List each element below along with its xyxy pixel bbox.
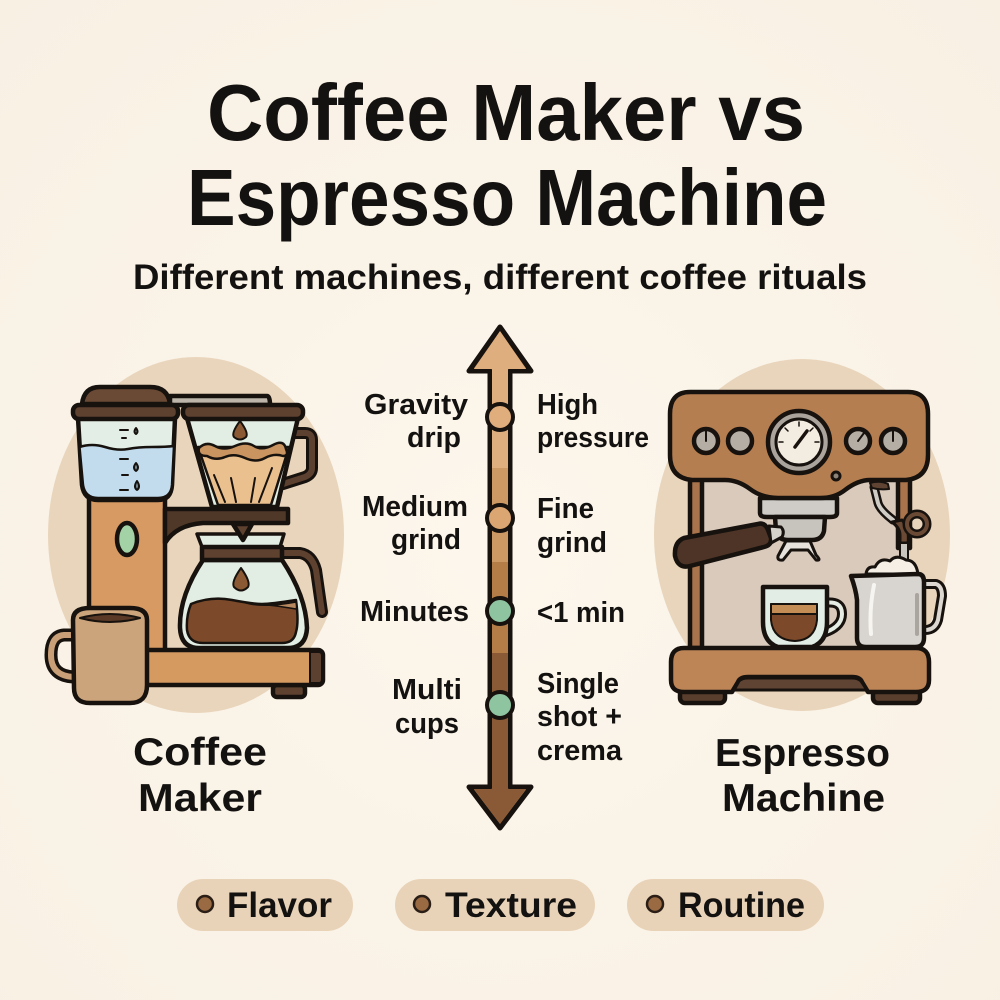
arrow colour band: upper middle: [492, 468, 508, 562]
subtitle: Different machines, different coffee rituals: [133, 258, 867, 297]
portafilter handle: [675, 524, 771, 567]
marker: mechanism: [487, 404, 513, 430]
background blob: espresso machine: [654, 359, 950, 711]
labels: espresso machine side: Single: [537, 668, 619, 700]
labels: coffee maker side: grind: [391, 524, 461, 556]
knob 2: [728, 429, 752, 453]
pill: flavor: [177, 879, 353, 931]
labels: espresso machine side: shot +: [537, 701, 622, 733]
group head: [760, 498, 837, 517]
right pillar: [898, 478, 910, 548]
machine base feet: [680, 690, 725, 703]
knob 1: [694, 429, 718, 453]
heading: coffee maker: Maker: [138, 777, 262, 820]
carafe handle: [280, 553, 322, 612]
labels: coffee maker side: drip: [407, 422, 461, 454]
crema: [771, 604, 817, 614]
labels: espresso machine side: pressure: [537, 422, 649, 454]
filter creases: [214, 468, 272, 502]
pill: routine: Routine: [678, 886, 805, 925]
arrow colour band: bottom: [474, 653, 526, 824]
wand ring: [907, 514, 927, 534]
espresso cup: [763, 587, 827, 647]
labels: espresso machine side: Fine: [537, 493, 594, 525]
knob 4: [881, 429, 905, 453]
left pillar: [690, 478, 702, 648]
marker: time: [487, 598, 513, 624]
dripper rim: [183, 405, 303, 419]
arrow outline: [469, 327, 531, 828]
mug opening: [80, 614, 140, 622]
water: [80, 445, 174, 498]
pitcher: [851, 574, 924, 647]
labels: espresso machine side: [537, 389, 649, 767]
machine body: [89, 498, 165, 652]
labels: coffee maker side: Medium: [362, 491, 468, 523]
knob 3: [846, 429, 870, 453]
labels: coffee maker side: Gravity: [364, 389, 468, 421]
labels: espresso machine side: grind: [537, 527, 607, 559]
paper filter: [198, 447, 289, 505]
panel: espresso machine: [654, 359, 950, 711]
milk foam: [866, 557, 918, 574]
dripper cone: [187, 418, 298, 507]
double-headed comparison arrow: [469, 327, 531, 828]
support arm: [165, 509, 288, 543]
icon: espresso machine illustration: [670, 392, 942, 703]
tank lid: [82, 387, 170, 404]
icon: coffee maker illustration: [51, 387, 323, 703]
mug: [73, 608, 147, 703]
labels: espresso machine side: High: [537, 389, 598, 421]
panel: coffee maker: [48, 357, 344, 713]
tank marks: [120, 428, 139, 490]
heading: coffee maker: [133, 731, 267, 820]
pill: texture: Texture: [445, 886, 577, 925]
drip: [233, 421, 247, 440]
espresso: [771, 604, 817, 641]
labels: coffee maker side: [360, 389, 469, 740]
arrow colour band: top: [474, 331, 526, 468]
coffee in carafe: [187, 599, 298, 643]
indicator: [832, 472, 840, 480]
labels: coffee maker side: Minutes: [360, 596, 469, 628]
labels: coffee maker side: Multi: [392, 674, 462, 706]
drip spout: [233, 524, 252, 540]
coffee grounds: [199, 443, 287, 460]
arrow colour band: lower middle: [492, 562, 508, 653]
heading: coffee maker: Coffee: [133, 731, 267, 774]
mug handle: [51, 635, 74, 677]
pill: routine: [627, 879, 824, 931]
title: [187, 68, 827, 242]
pitcher handle: [922, 584, 942, 630]
labels: espresso machine side: <1 min: [537, 597, 625, 629]
pressure gauge: [768, 411, 830, 473]
carafe: [180, 560, 307, 648]
back plate: [170, 396, 270, 405]
labels: coffee maker side: cups: [395, 708, 459, 740]
pill: texture: [395, 879, 595, 931]
espresso cup handle: [820, 602, 842, 634]
status light: [117, 523, 137, 555]
base notch: [734, 678, 867, 690]
heading: espresso machine: [715, 732, 890, 820]
title: Espresso Machine: [187, 153, 827, 242]
water tank: [78, 418, 175, 500]
labels: espresso machine side: crema: [537, 735, 623, 767]
back panel: [702, 480, 900, 648]
marker: servings: [487, 692, 513, 718]
heading: espresso machine: Espresso: [715, 732, 890, 775]
hot plate base: [273, 685, 305, 697]
head: [670, 392, 928, 498]
title: Coffee Maker vs: [207, 68, 805, 157]
carafe collar: [197, 534, 284, 547]
spouts: [778, 541, 819, 560]
steam wand: [874, 487, 893, 520]
carafe drop: [233, 568, 249, 590]
background blob: coffee maker: [48, 357, 344, 713]
heading: espresso machine: Machine: [722, 777, 885, 820]
pill: flavor: Flavor: [227, 886, 332, 925]
marker: grind: [487, 505, 513, 531]
dripper handle: [283, 433, 312, 484]
machine base: [671, 648, 929, 692]
